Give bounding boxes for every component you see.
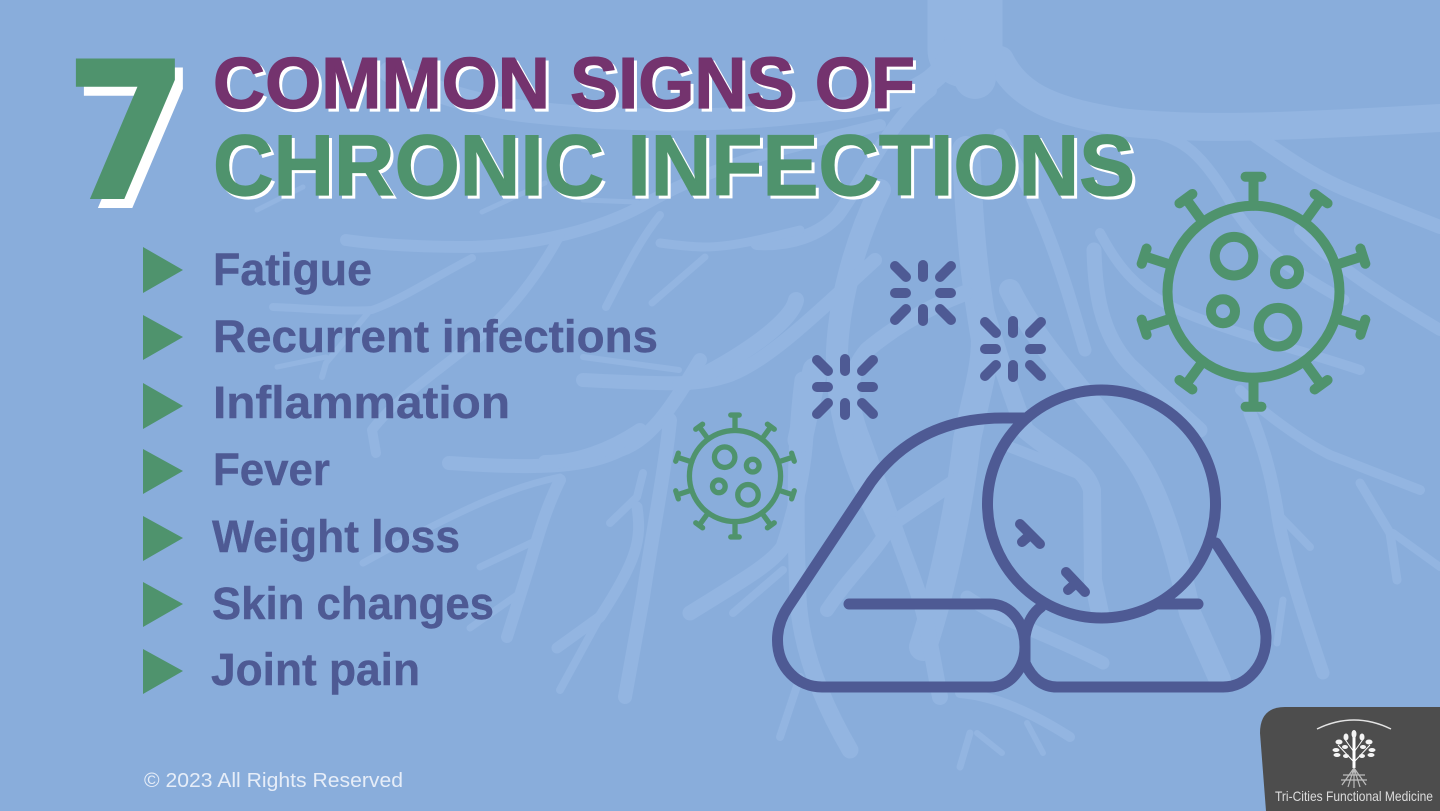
title line 2: CHRONIC INFECTIONS [213,118,1135,214]
background: bronchial tree [257,0,1440,767]
item: Joint pain: Joint pain [211,644,420,695]
symptom list [143,244,658,695]
icon: germ burst right [985,321,1041,377]
icon: sick person resting head on arms [778,390,1266,687]
item: Weight loss: Weight loss [212,511,460,562]
right forearm line [1159,598,1198,610]
item: Fatigue [143,244,372,295]
copyright: © 2023 All Rights Reserved [144,770,403,792]
left arm and shoulder [778,418,1025,687]
right arm and shoulder [1025,543,1266,687]
item: Fatigue: Fatigue [213,244,372,295]
logo tree [1332,730,1376,788]
title line 1: COMMON SIGNS OF [213,44,915,124]
logo panel [1260,707,1440,811]
item: Recurrent infections: Recurrent infections [213,311,658,362]
item: Skin changes: Skin changes [212,578,494,629]
head [988,390,1216,618]
item: Fever [143,444,330,495]
icon: germ burst left [817,359,873,415]
icon: small virus [676,415,794,537]
item: Inflammation: Inflammation [213,377,510,428]
big number 7: 7 [65,22,188,243]
item: Fever: Fever [213,444,330,495]
icon: large virus [1142,177,1365,407]
closed eyes [1020,524,1085,592]
icon: germ burst top [895,265,951,321]
logo arc [1317,720,1391,729]
